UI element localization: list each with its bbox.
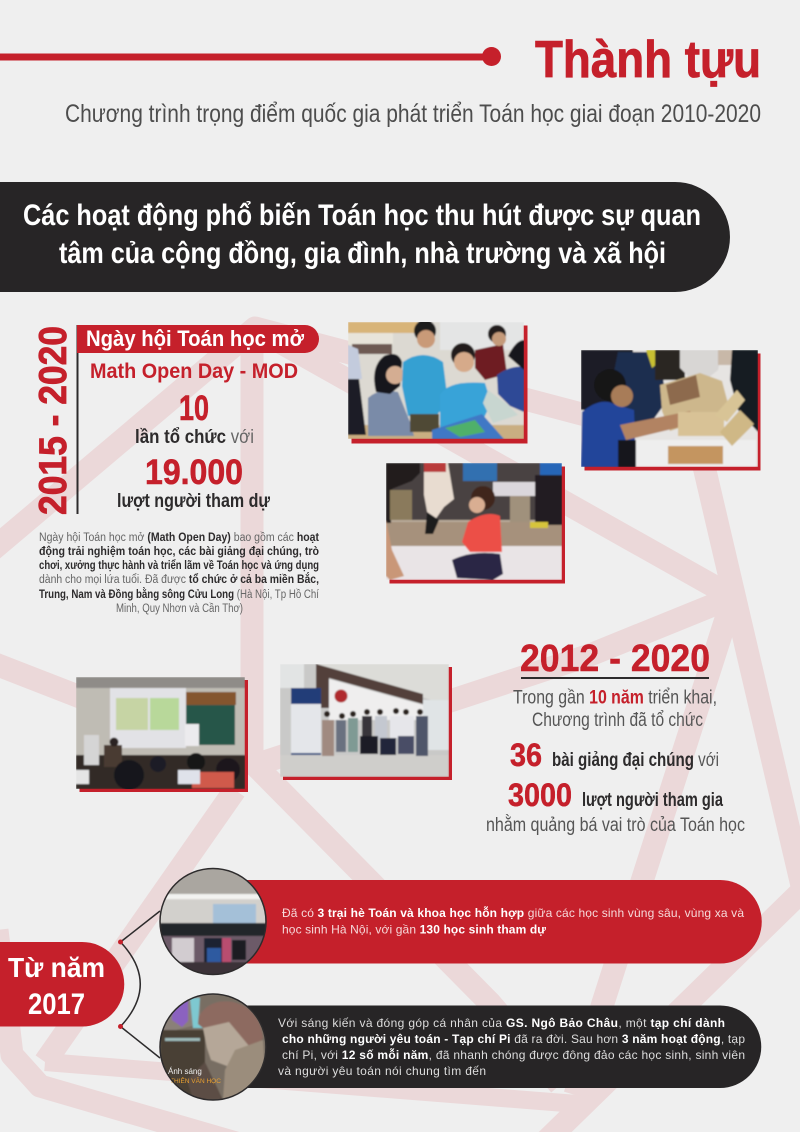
red tag heading: Ngày hội Toán học mở bbox=[86, 326, 304, 351]
stat: 36 lectures: 36 bbox=[510, 737, 542, 773]
photo circle: Pi magazine cover: Ánh sáng bbox=[168, 1067, 202, 1076]
banner: headline bbox=[0, 182, 730, 292]
panel: public lectures 2012 - 2020: Trong gần 10 năm triển khai, bbox=[513, 688, 717, 708]
panel: Pi magazine: cho những người yêu toán - Tạp chí Pi đã ra đời. Sau hơn 3 năm hoạt động, tạp bbox=[282, 1032, 745, 1046]
panel: Pi magazine bbox=[240, 1006, 761, 1088]
panel: public lectures 2012 - 2020: Chương trình đã tổ chức bbox=[532, 710, 703, 731]
stat: 3000 participants: lượt người tham gia bbox=[582, 790, 723, 811]
connector bracket bbox=[118, 911, 160, 1058]
label: Từ năm 2017: 2017 bbox=[28, 988, 85, 1021]
description paragraph: Trung, Nam và Đồng bằng sông Cửu Long (Hà Nội, Tp Hồ Chí bbox=[39, 588, 320, 601]
photo: students at Math Open Day bbox=[348, 320, 528, 444]
description paragraph: chơi, xưởng thực hành và triển lãm về Toán học và ứng dụng bbox=[39, 560, 319, 572]
label: Từ năm 2017: Từ năm bbox=[8, 952, 105, 983]
description paragraph: Minh, Quy Nhơn và Cần Thơ) bbox=[116, 603, 243, 615]
stat: 10 events: lần tổ chức với bbox=[135, 427, 254, 448]
photo: group at the institute bbox=[280, 664, 452, 780]
stat: 3000 participants: 3000 bbox=[508, 777, 572, 813]
stat: 3000 participants bbox=[508, 777, 723, 813]
photo circle: Pi magazine cover bbox=[160, 994, 267, 1101]
label: Từ năm 2017 bbox=[0, 942, 124, 1026]
title: Thành tựu bbox=[535, 31, 761, 89]
stat: 19.000 attendees: 19.000 bbox=[145, 453, 243, 492]
panel: summer camps: Đã có 3 trại hè Toán và khoa học hỗn hợp giữa các học sinh vùng sâu, vùng xa và bbox=[282, 905, 744, 920]
panel: summer camps bbox=[240, 880, 762, 964]
panel: public lectures 2012 - 2020 bbox=[486, 638, 745, 836]
title bbox=[0, 31, 761, 89]
banner: headline: tâm của cộng đồng, gia đình, nhà trường và xã hội bbox=[59, 237, 666, 270]
description paragraph bbox=[39, 532, 320, 615]
panel: Pi magazine: Với sáng kiến và đóng góp cá nhân của GS. Ngô Bảo Châu, một tạp chí dành bbox=[278, 1016, 725, 1030]
stat: 36 lectures bbox=[510, 737, 719, 773]
panel: public lectures 2012 - 2020: nhằm quảng bá vai trò của Toán học bbox=[486, 814, 745, 836]
year label 2015 - 2020: 2015 - 2020 bbox=[32, 326, 75, 515]
stat: 19.000 attendees bbox=[117, 453, 270, 512]
panel: Pi magazine: và người yêu toán nói chung tìm đến bbox=[278, 1064, 486, 1078]
panel: Math Open Day bbox=[32, 325, 320, 615]
photo: boy building with wooden boxes bbox=[581, 350, 760, 470]
subheading: Math Open Day - MOD bbox=[90, 360, 298, 383]
stat: 10 events: 10 bbox=[179, 389, 209, 428]
year heading: 2012 - 2020 bbox=[520, 638, 710, 680]
photo circle: summer camp group bbox=[160, 868, 266, 976]
photo: public lecture bbox=[76, 677, 248, 792]
description paragraph: động trải nghiệm toán học, các bài giảng đại chúng, trò bbox=[39, 546, 319, 558]
panel: summer camps: học sinh Hà Nội, với gần 130 học sinh tham dự bbox=[282, 922, 546, 936]
photo circle: Pi magazine cover: THIÊN VĂN HỌC bbox=[170, 1076, 221, 1085]
description paragraph: Ngày hội Toán học mở (Math Open Day) bao gồm các hoạt bbox=[39, 532, 319, 544]
panel: Pi magazine: chí Pi, với 12 số mỗi năm, đã nhanh chóng được đông đảo các học sinh, sinh viên bbox=[282, 1047, 745, 1062]
photo: little girl drawing on the floor bbox=[386, 463, 565, 584]
description paragraph: dành cho mọi lứa tuổi. Đã được tổ chức ở cả ba miền Bắc, bbox=[39, 573, 319, 586]
stat: 10 events bbox=[135, 389, 254, 448]
stat: 19.000 attendees: lượt người tham dự bbox=[117, 491, 270, 512]
stat: 36 lectures: bài giảng đại chúng với bbox=[552, 750, 719, 771]
